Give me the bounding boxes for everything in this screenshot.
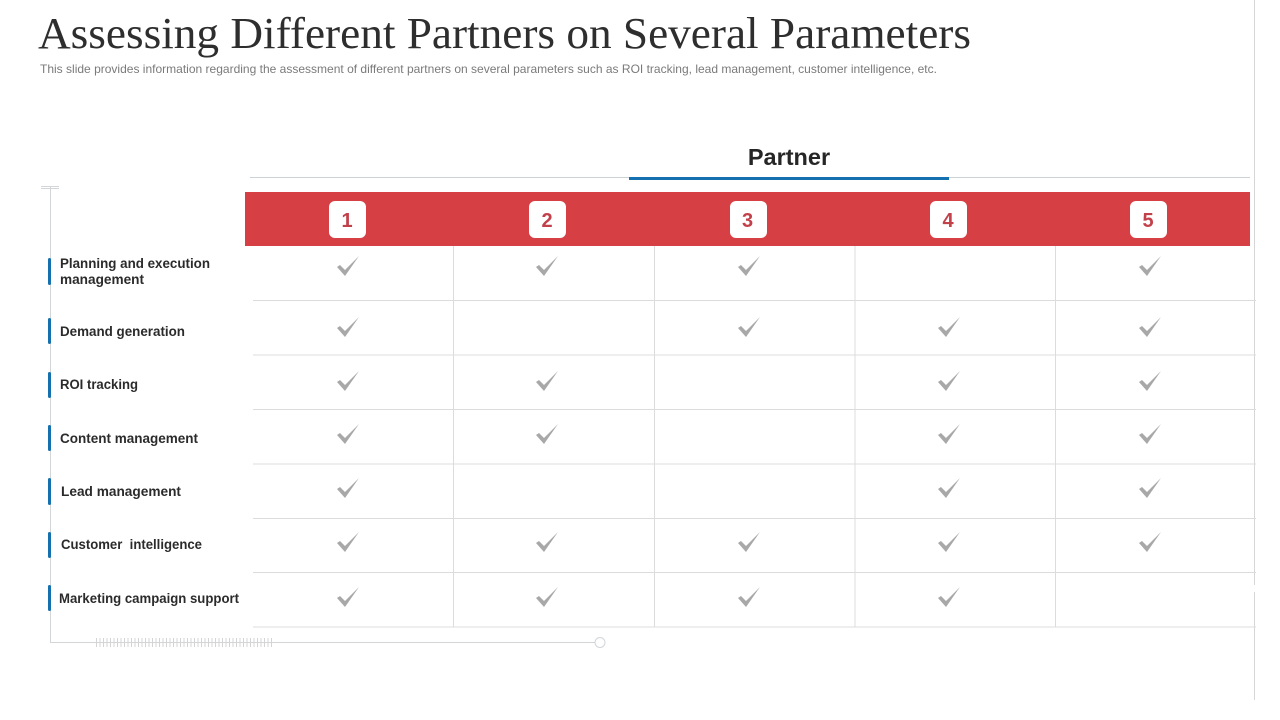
partner 4 badge bbox=[930, 201, 967, 238]
row: Planning and execution management bbox=[48, 256, 1161, 287]
partner 5 badge bbox=[1130, 201, 1167, 238]
row: Planning and execution management: management bbox=[60, 272, 145, 287]
partner 4 badge: 4 bbox=[942, 210, 954, 232]
row: Customer intelligence: Customer intelligence bbox=[61, 537, 202, 552]
table grid bbox=[253, 246, 1256, 627]
partner 2 badge bbox=[529, 201, 566, 238]
row: Demand generation: Demand generation bbox=[60, 324, 185, 339]
partner 3 badge bbox=[730, 201, 767, 238]
partner header band bbox=[245, 192, 1250, 246]
partner 5 badge: 5 bbox=[1142, 210, 1154, 232]
partner heading: Partner bbox=[748, 144, 830, 170]
row: ROI tracking: ROI tracking bbox=[60, 377, 138, 392]
row: Customer intelligence bbox=[48, 532, 1161, 558]
right frame line bbox=[1254, 0, 1256, 700]
row: Lead management bbox=[48, 478, 1161, 505]
title: Assessing Different Partners on Several Parameters bbox=[38, 9, 971, 58]
left frame bracket bbox=[41, 186, 605, 648]
partner heading bbox=[250, 144, 1250, 180]
row: Lead management: Lead management bbox=[61, 484, 181, 499]
partner 1 badge bbox=[329, 201, 366, 238]
row: Demand generation bbox=[48, 317, 1161, 344]
row: ROI tracking bbox=[48, 371, 1161, 398]
row: Content management: Content management bbox=[60, 431, 199, 446]
subtitle: This slide provides information regarding the assessment of different partners on several parameters such as ROI tracking, lead management, customer intelligence, etc. bbox=[40, 62, 937, 76]
row: Marketing campaign support bbox=[48, 585, 960, 611]
row: Marketing campaign support: Marketing campaign support bbox=[59, 591, 239, 606]
hatch pattern on bottom line bbox=[96, 638, 274, 647]
row: Planning and execution management: Planning and execution bbox=[60, 256, 210, 271]
partner 2 badge: 2 bbox=[541, 210, 553, 232]
partner 1 badge: 1 bbox=[341, 210, 353, 232]
partner 3 badge: 3 bbox=[742, 210, 753, 232]
row: Content management bbox=[48, 424, 1161, 451]
